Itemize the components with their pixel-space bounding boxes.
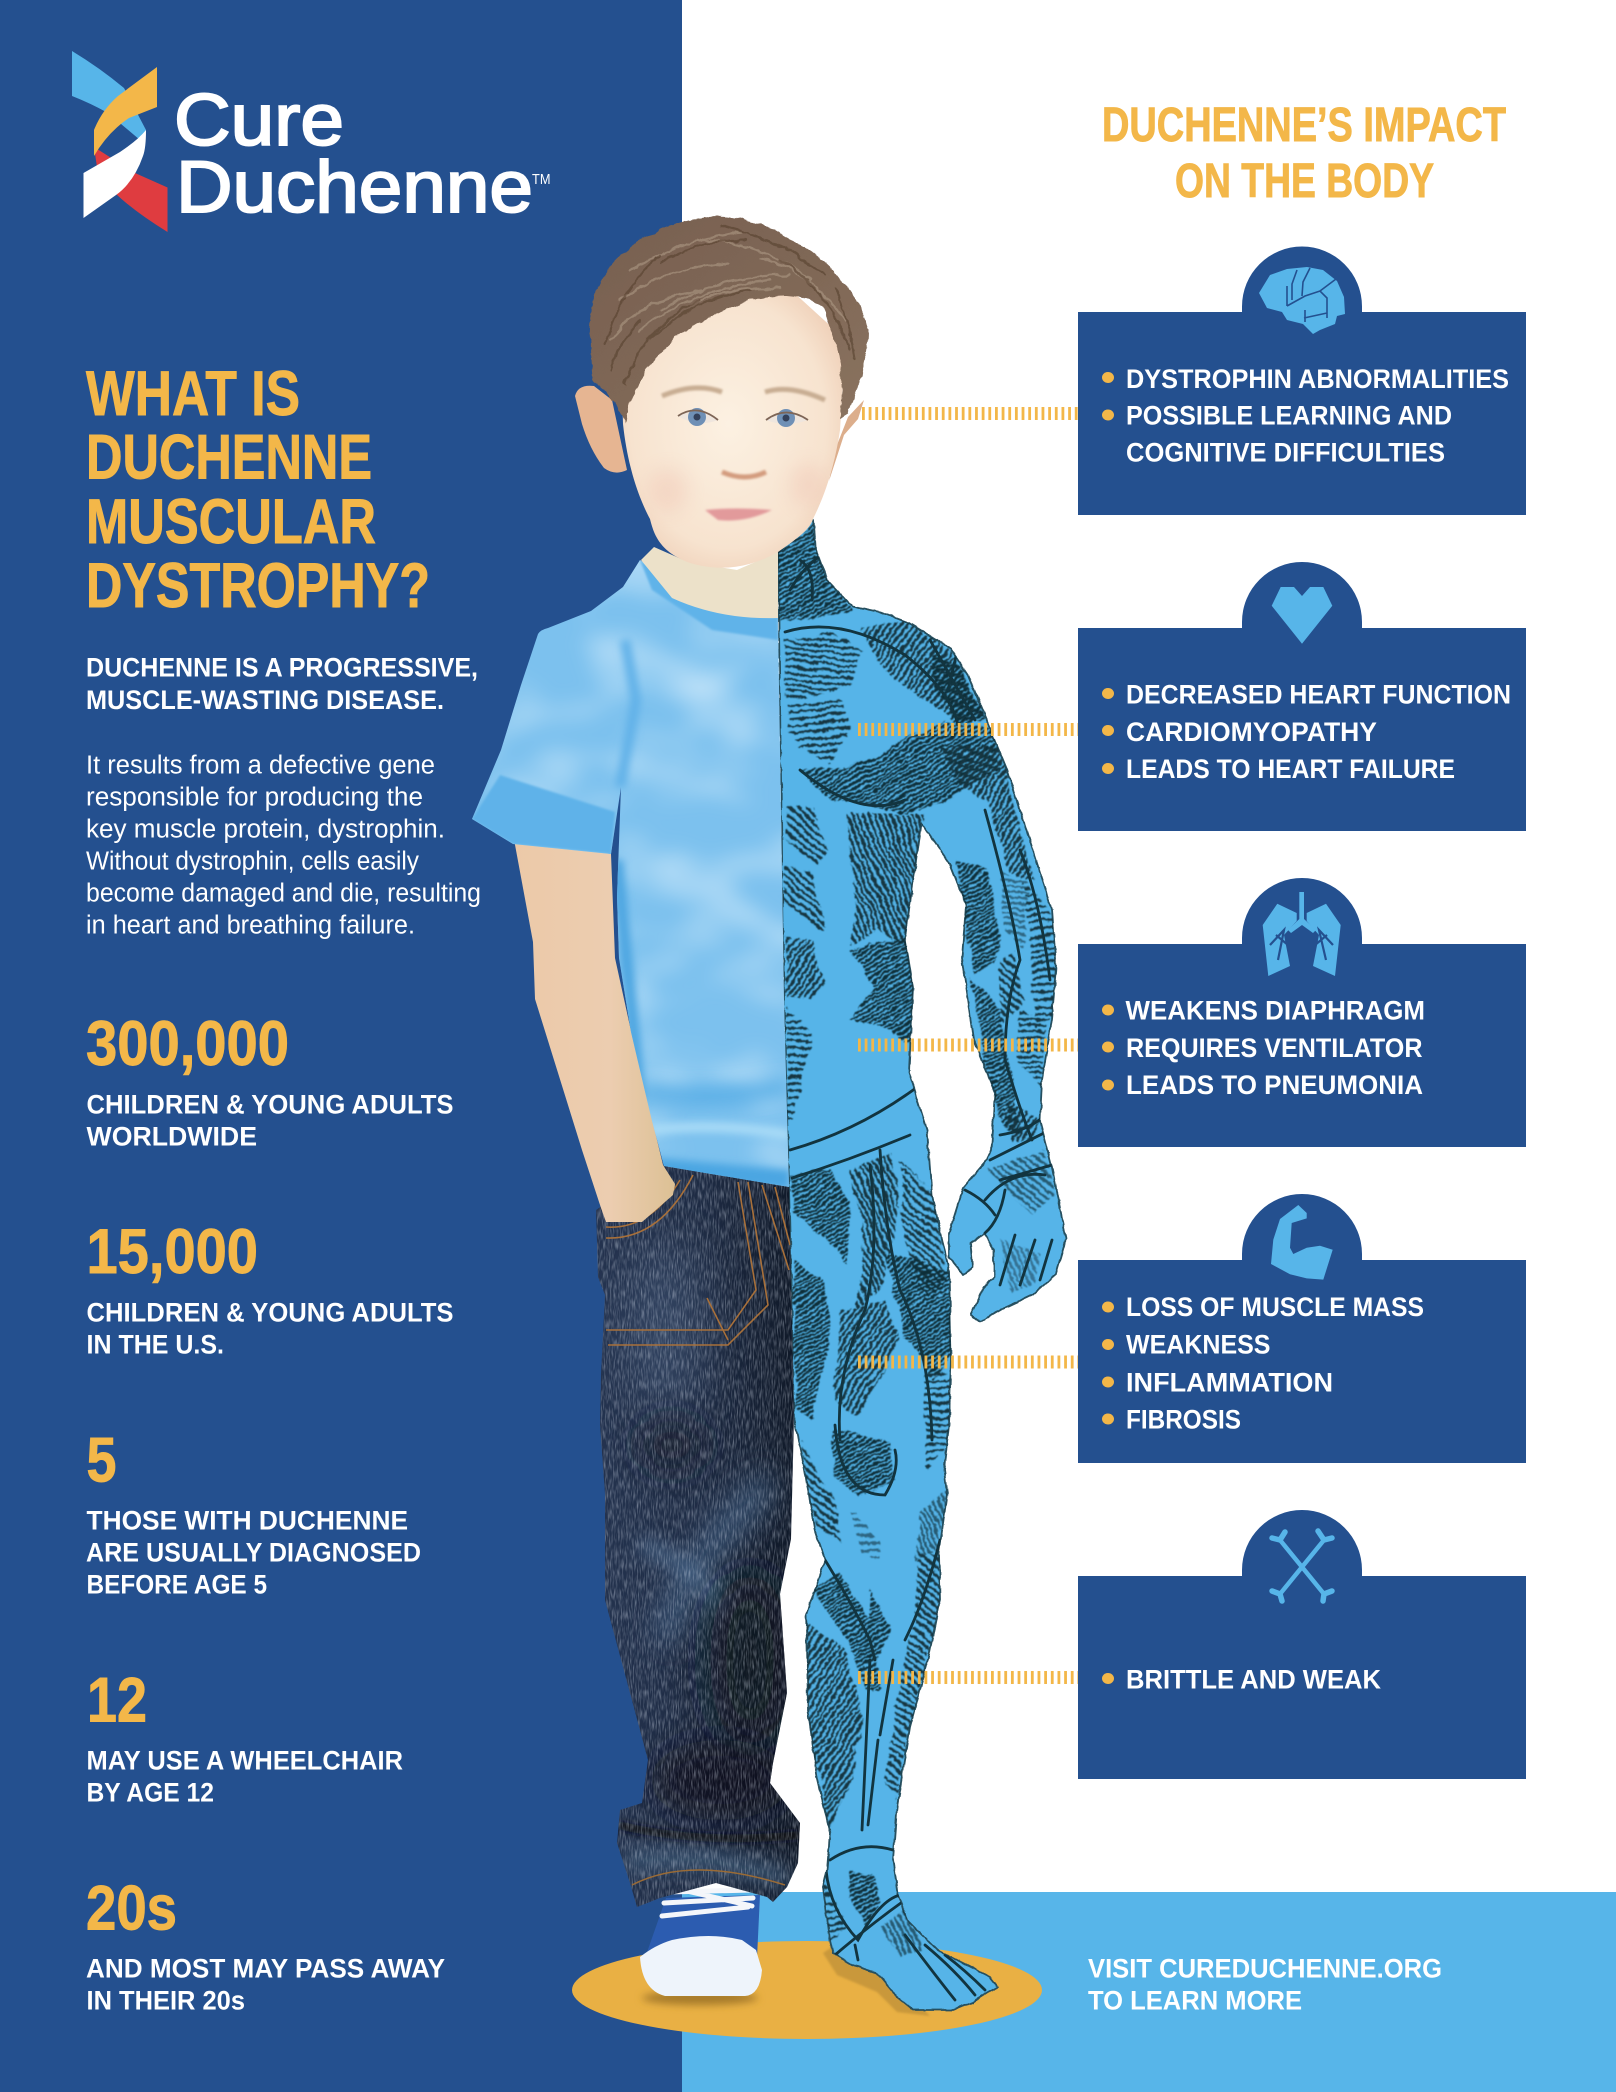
- left eye: [678, 408, 718, 426]
- stat: 5: [86, 1426, 421, 1600]
- connector: lungs: [858, 1038, 1078, 1052]
- brows: [662, 388, 825, 400]
- heading: what is Duchenne muscular dystrophy: DUCHENNE: [86, 422, 372, 492]
- jeans shading: [590, 1160, 810, 1920]
- subheading: progressive muscle-wasting disease: MUSCLE-WASTING DISEASE.: [86, 685, 444, 715]
- shoe: blue canvas: [645, 1895, 760, 1958]
- subheading: progressive muscle-wasting disease: [86, 652, 478, 715]
- panel: heart: [1078, 562, 1526, 831]
- panel shape: [1078, 562, 1526, 831]
- panel: muscle: [1078, 1194, 1526, 1463]
- bullet list: [1102, 996, 1425, 1100]
- stat: 20s: IN THEIR 20s: [86, 1986, 245, 2016]
- text block: explanation: become damaged and die, resulting: [86, 880, 481, 908]
- cheeks: [652, 468, 821, 508]
- logo: CureDuchenne: [72, 51, 550, 232]
- shoe shadow: [642, 1991, 758, 2005]
- icon: lungs: [1263, 892, 1341, 976]
- panel shape: [1078, 1194, 1526, 1463]
- stat: 15,000: 15,000: [86, 1217, 258, 1287]
- jeans: [596, 1165, 800, 1907]
- panel: bones: [1078, 1510, 1526, 1779]
- stat: 15,000: IN THE U.S.: [86, 1330, 224, 1360]
- stat: 5: 5: [86, 1426, 116, 1496]
- stat: 12: BY AGE 12: [86, 1778, 214, 1808]
- right eye: [766, 409, 808, 427]
- muscle contour lines: [785, 555, 1052, 2000]
- right heading: Duchenne's impact on the body: DUCHENNE’S IMPACT: [1102, 98, 1506, 152]
- bullet list: [1102, 364, 1509, 468]
- figure: muscular half of body: [778, 519, 1066, 2016]
- stat: 300,000: CHILDREN & YOUNG ADULTS: [86, 1090, 454, 1120]
- stat: 20s: 20s: [86, 1874, 177, 1944]
- muscle hatching: [778, 522, 1060, 1955]
- bullet list: [1102, 1292, 1424, 1434]
- text block: explanation: key muscle protein, dystrophin.: [86, 816, 445, 844]
- panel: left blue background: [0, 0, 682, 2092]
- icon: crossed bones: [1272, 1531, 1332, 1601]
- bullet list: WEAKENS DIAPHRAGM: [1126, 996, 1425, 1026]
- stat: 20s: AND MOST MAY PASS AWAY: [86, 1954, 445, 1984]
- right heading: Duchenne's impact on the body: ON THE BODY: [1175, 154, 1434, 208]
- bullet list: INFLAMMATION: [1126, 1368, 1333, 1398]
- logo wordmark: [174, 80, 533, 228]
- bullet list: CARDIOMYOPATHY: [1126, 717, 1377, 747]
- mouth: [705, 508, 772, 521]
- bullet list: [1102, 680, 1511, 784]
- heading: what is Duchenne muscular dystrophy: MUSCULAR: [86, 487, 376, 557]
- text block: explanation: Without dystrophin, cells easily: [86, 848, 419, 876]
- icon: flexed arm: [1271, 1205, 1333, 1280]
- call to action: [1088, 1954, 1442, 2016]
- stat: 12: [86, 1666, 403, 1808]
- bullet list: WEAKNESS: [1126, 1330, 1270, 1360]
- t-shirt: [472, 560, 789, 1187]
- panel: brain: [1078, 247, 1526, 515]
- foot shadow: [823, 1945, 930, 2016]
- connector: head: [862, 407, 1078, 420]
- panel: bottom light-blue band: [682, 1892, 1616, 2092]
- stat: 5: ARE USUALLY DIAGNOSED: [86, 1538, 421, 1568]
- stat: 15,000: CHILDREN & YOUNG ADULTS: [86, 1298, 454, 1328]
- stat: 5: BEFORE AGE 5: [86, 1570, 267, 1600]
- bullet list: REQUIRES VENTILATOR: [1126, 1033, 1422, 1063]
- logo trademark: TM: [532, 171, 550, 188]
- text block: explanation: responsible for producing the: [86, 784, 423, 812]
- stat: 12: 12: [87, 1666, 147, 1736]
- panel shape: [1078, 878, 1526, 1147]
- stat: 15,000: [86, 1217, 454, 1360]
- bullet list: LOSS OF MUSCLE MASS: [1126, 1292, 1424, 1322]
- text block: explanation: It results from a defective gene: [86, 752, 435, 780]
- bullet list: FIBROSIS: [1126, 1404, 1241, 1434]
- face: [620, 280, 846, 568]
- shoe: laces: [662, 1886, 753, 1916]
- right heading: Duchenne's impact on the body: [1102, 98, 1506, 208]
- muscle silhouette: [778, 519, 1066, 2010]
- panel shape: [1078, 247, 1526, 515]
- logo wordmark: Duchenne: [176, 147, 533, 228]
- stat: 20s: [86, 1874, 445, 2016]
- stat: 12: MAY USE A WHEELCHAIR: [86, 1746, 403, 1776]
- bullet list: BRITTLE AND WEAK: [1126, 1664, 1381, 1694]
- call to action: TO LEARN MORE: [1088, 1986, 1302, 2016]
- stat: 5: THOSE WITH DUCHENNE: [86, 1506, 408, 1536]
- hair strands: [605, 225, 855, 385]
- bullet list: LEADS TO PNEUMONIA: [1126, 1070, 1423, 1100]
- text block: explanation: in heart and breathing failure.: [86, 912, 415, 940]
- call to action: VISIT CUREDUCHENNE.ORG: [1088, 1954, 1442, 1984]
- connector: muscle: [858, 1356, 1078, 1368]
- logo mark: helix ribbons: [72, 51, 168, 232]
- text block: explanation: [86, 752, 481, 940]
- left ear: [575, 386, 627, 473]
- arm and hand: [513, 834, 675, 1222]
- stat: 300,000: 300,000: [86, 1009, 289, 1079]
- shoe: sole: [640, 1936, 762, 1996]
- right ear: [829, 400, 864, 481]
- heading: what is Duchenne muscular dystrophy: [86, 359, 430, 621]
- bullet list: DECREASED HEART FUNCTION: [1126, 680, 1511, 710]
- gold floor ellipse: [572, 1941, 1042, 2039]
- heading: what is Duchenne muscular dystrophy: DYSTROPHY?: [86, 551, 430, 621]
- logo wordmark: Cure: [174, 80, 344, 161]
- heading: what is Duchenne muscular dystrophy: WHAT IS: [86, 359, 300, 429]
- stat: 300,000: WORLDWIDE: [86, 1122, 257, 1152]
- bullet list: LEADS TO HEART FAILURE: [1126, 754, 1455, 784]
- bullet list: COGNITIVE DIFFICULTIES: [1126, 438, 1445, 468]
- icon: heart: [1272, 587, 1332, 644]
- neck: [641, 547, 778, 618]
- bullet list: DYSTROPHIN ABNORMALITIES: [1126, 364, 1509, 394]
- nose: [722, 472, 766, 477]
- bullet list: POSSIBLE LEARNING AND: [1126, 400, 1452, 430]
- hair: [590, 217, 868, 424]
- stat: 300,000: [86, 1009, 454, 1152]
- connector: bones: [858, 1671, 1078, 1684]
- icon: brain: [1259, 267, 1345, 334]
- figure: boy photo half: [460, 217, 868, 2005]
- subheading: progressive muscle-wasting disease: DUCHENNE IS A PROGRESSIVE,: [86, 652, 478, 682]
- panel: lungs: [1078, 878, 1526, 1147]
- connector: heart: [858, 723, 1078, 736]
- t-shirt shading: [472, 560, 789, 1187]
- panel shape: [1078, 1510, 1526, 1779]
